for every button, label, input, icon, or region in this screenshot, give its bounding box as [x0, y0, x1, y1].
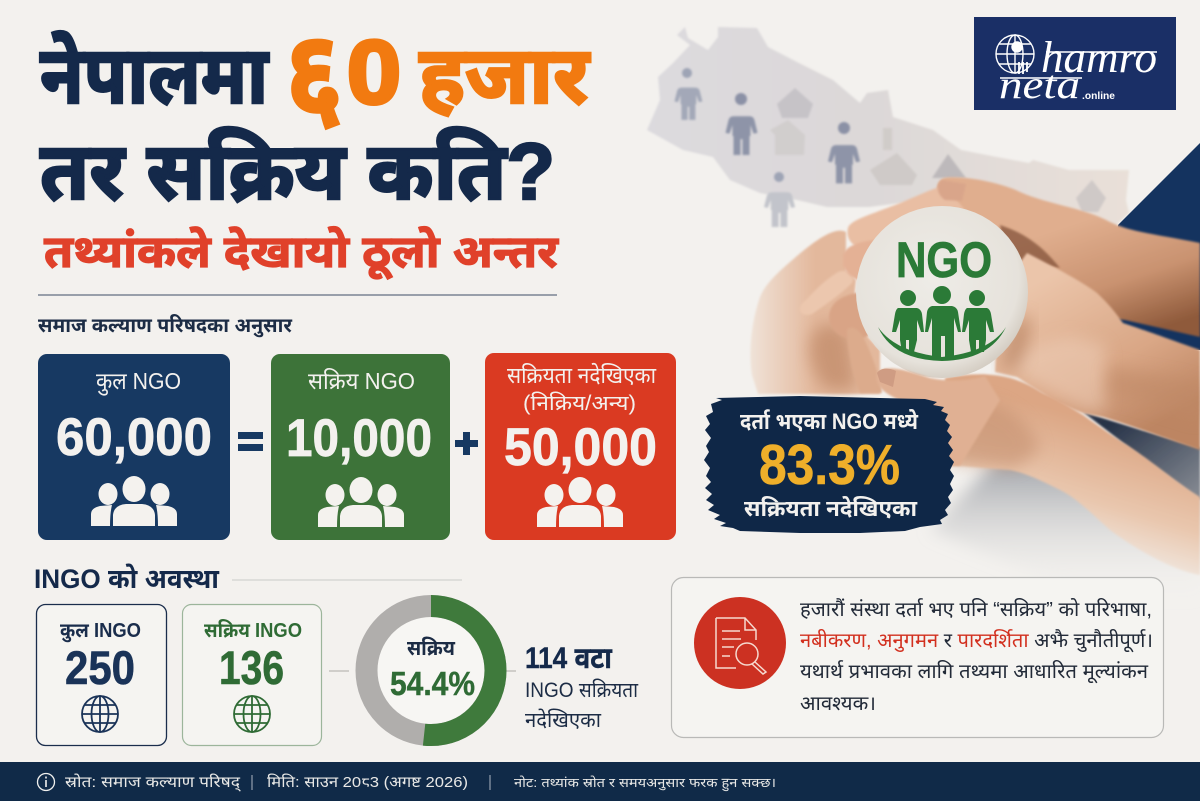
logo globe: [996, 35, 1034, 74]
footer bar: [0, 762, 1200, 801]
inactive INGO stat: 114 वटा: [525, 642, 613, 675]
icon: info: [38, 774, 54, 790]
title: तर सक्रिय कति?: [40, 127, 555, 216]
nepal map with silhouettes: [647, 27, 1129, 240]
panel: total INGO: [36, 604, 166, 746]
panel: active INGO: 136: [219, 641, 284, 694]
hands holding NGO ball: [750, 177, 1200, 575]
callout panel: हजारौं संस्था दर्ता भए पनि “सक्रिय” को परिभाषा,: [800, 597, 1152, 621]
NGO ball: [856, 206, 1028, 378]
section label: समाज कल्याण परिषदका अनुसार: [38, 313, 293, 338]
hand shadow: [930, 440, 1200, 600]
INGO heading: INGO को अवस्था: [34, 564, 220, 594]
donut chart: 54.4% active: सक्रिय: [407, 636, 456, 660]
logo: hamro neta: neta: [999, 62, 1080, 107]
icon: people: [318, 477, 404, 527]
card: active NGO: [271, 354, 450, 540]
callout panel: यथार्थ प्रभावका लागि तथ्यमा आधारित मूल्यांकन: [800, 659, 1149, 684]
footer bar: मिति: साउन 20८3 (अगष्ट 2026): [267, 774, 468, 791]
icon: document with magnifier: [694, 597, 786, 689]
badge: 83.3%: [704, 396, 954, 533]
icon: globe: [234, 696, 270, 732]
inactive INGO stat: INGO सक्रियता: [525, 678, 639, 702]
navy corner shape: [1105, 143, 1200, 350]
fingertips: [847, 186, 965, 250]
title: [40, 8, 591, 216]
card: total NGO: 60,000: [56, 408, 212, 467]
inactive INGO stat: [525, 642, 639, 732]
card: total NGO: कुल NGO: [96, 368, 181, 396]
badge: 83.3%: दर्ता भएका NGO मध्ये: [740, 409, 919, 434]
badge: 83.3%: 83.3%: [759, 433, 900, 497]
title: ६: [285, 8, 343, 142]
panel: total INGO: कुल INGO: [60, 620, 141, 643]
equals sign: [238, 432, 263, 451]
ball people icon: [878, 286, 1006, 361]
card: inactive NGO: सक्रियता नदेखिएका: [507, 362, 656, 388]
left hand: [750, 231, 880, 394]
title: नेपालमा: [40, 30, 269, 120]
logo: hamro neta: hamro: [1041, 33, 1157, 82]
panel: active INGO: [182, 604, 322, 746]
badge: 83.3%: सक्रियता नदेखिएका: [744, 496, 918, 521]
callout panel: [672, 578, 1164, 738]
donut chart: 54.4% active: 54.4%: [390, 665, 475, 702]
plus sign: [455, 432, 478, 455]
icon: people: [537, 477, 623, 527]
title: हजार: [419, 31, 591, 120]
card: inactive NGO: 50,000: [504, 418, 657, 477]
card: active NGO: सक्रिय NGO: [308, 368, 415, 394]
title: 0: [347, 23, 401, 123]
middle forearm and palm: [995, 253, 1200, 450]
icon: people: [91, 476, 177, 526]
card: active NGO: 10,000: [286, 409, 432, 468]
panel: total INGO: 250: [65, 641, 135, 694]
panel: active INGO: सक्रिय INGO: [204, 618, 302, 642]
card: inactive NGO: (निक्रिय/अन्य): [523, 391, 636, 415]
logo: hamro neta: [974, 17, 1176, 110]
thumb on top of ball: [876, 368, 1000, 466]
callout panel: आवश्यक।: [800, 693, 876, 715]
card: inactive NGO: [485, 353, 676, 540]
logo: hamro neta: .online: [1082, 91, 1115, 102]
callout panel: नबीकरण, अनुगमन र पारदर्शिता अझै चुनौतीपूर्ण।: [800, 627, 1153, 653]
inactive INGO stat: नदेखिएका: [525, 708, 602, 732]
card: total NGO: [38, 354, 230, 540]
donut chart: 54.4% active: [366, 606, 496, 735]
ball label: NGO: [896, 232, 992, 288]
upper hand and forearm: [937, 177, 1200, 337]
footer bar: स्रोत: समाज कल्याण परिषद्: [65, 774, 241, 793]
icon: globe: [82, 696, 118, 732]
subtitle: तथ्यांकले देखायो ठूलो अन्तर: [44, 226, 559, 280]
lower forearm: [945, 374, 1200, 575]
footer bar: नोट: तथ्यांक स्रोत र समयअनुसार फरक हुन सक्छ।: [514, 775, 776, 792]
